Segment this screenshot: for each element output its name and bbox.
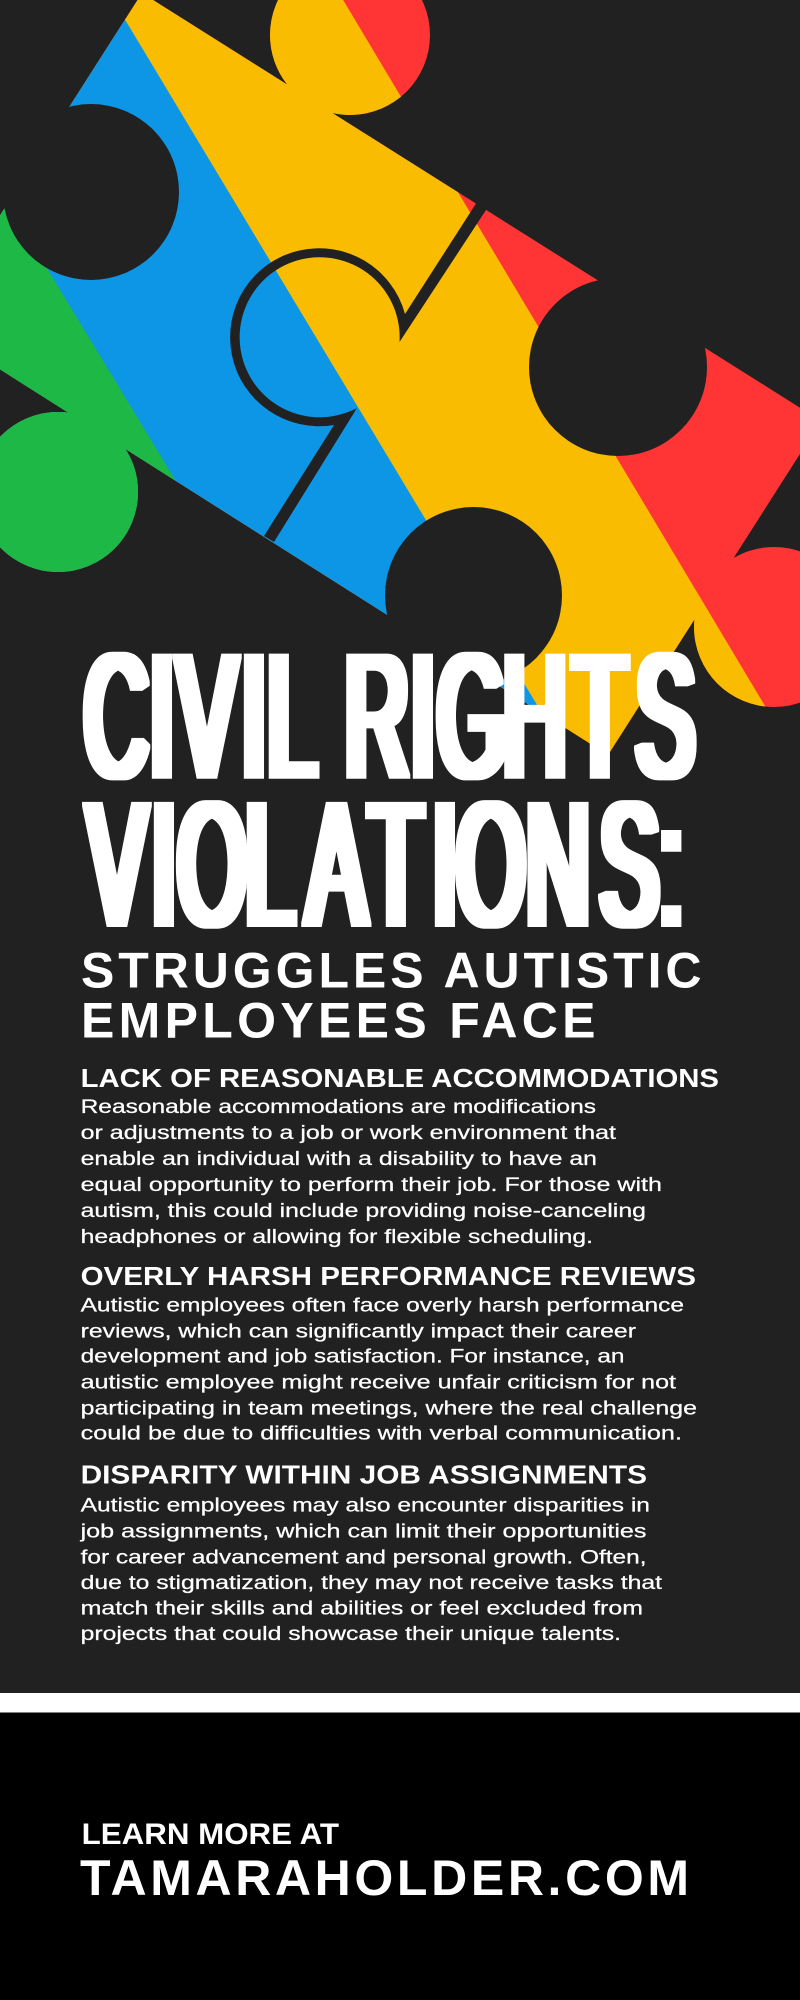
- footer background: [0, 1712, 800, 2000]
- body text: Autistic employees often face overly harsh performance: [81, 1296, 684, 1317]
- heading: OVERLY HARSH PERFORMANCE REVIEWS: [81, 1261, 696, 1291]
- body text: projects that could showcase their unique talents.: [81, 1624, 621, 1645]
- call to action: LEARN MORE AT: [82, 1818, 339, 1851]
- heading: LACK OF REASONABLE ACCOMMODATIONS: [81, 1063, 719, 1093]
- body text: participating in team meetings, where the real challenge: [81, 1399, 697, 1420]
- section: disparity within job assignments: [79, 1459, 663, 1645]
- heading: DISPARITY WITHIN JOB ASSIGNMENTS: [81, 1459, 647, 1489]
- body text: reviews, which can significantly impact their career: [81, 1322, 637, 1343]
- section: overly harsh performance reviews: [81, 1261, 697, 1444]
- body text: Reasonable accommodations are modifications: [81, 1097, 596, 1118]
- body text: enable an individual with a disability to have an: [81, 1149, 597, 1170]
- footer: [0, 1712, 800, 2000]
- body text: autism, this could include providing noise-canceling: [81, 1201, 646, 1222]
- body text: [81, 1097, 662, 1248]
- coloured puzzle stripes: [0, 0, 800, 820]
- subtitle: EMPLOYEES FACE: [81, 993, 596, 1049]
- body text: equal opportunity to perform their job. For those with: [81, 1175, 662, 1196]
- body text: [79, 1496, 663, 1645]
- body text: or adjustments to a job or work environment that: [81, 1123, 617, 1144]
- interlocking slit between pieces: [230, 202, 487, 542]
- subtitle: [81, 943, 702, 1049]
- title: CIVIL RIGHTS: [84, 619, 695, 815]
- body text: Autistic employees may also encounter disparities in: [81, 1496, 650, 1517]
- puzzle pieces illustration: [0, 0, 800, 820]
- white divider band: [0, 1693, 800, 1712]
- body text: [81, 1296, 697, 1444]
- puzzle sockets: [3, 104, 707, 684]
- body text: match their skills and abilities or feel excluded from: [81, 1599, 643, 1620]
- website: TAMARAHOLDER.COM: [80, 1850, 689, 1906]
- body text: due to stigmatization, they may not receive tasks that: [81, 1573, 663, 1594]
- body text: for career advancement and personal growth. Often,: [81, 1547, 647, 1568]
- subtitle: STRUGGLES AUTISTIC: [81, 943, 702, 999]
- body text: could be due to difficulties with verbal communication.: [81, 1424, 682, 1444]
- body text: development and job satisfaction. For instance, an: [81, 1347, 625, 1368]
- body text: headphones or allowing for flexible scheduling.: [81, 1227, 593, 1248]
- body text: autistic employee might receive unfair criticism for not: [81, 1373, 677, 1394]
- title: [84, 619, 695, 963]
- section: lack of reasonable accommodations: [81, 1063, 719, 1248]
- body text: job assignments, which can limit their opportunities: [79, 1521, 647, 1542]
- title: VIOLATIONS:: [88, 767, 683, 963]
